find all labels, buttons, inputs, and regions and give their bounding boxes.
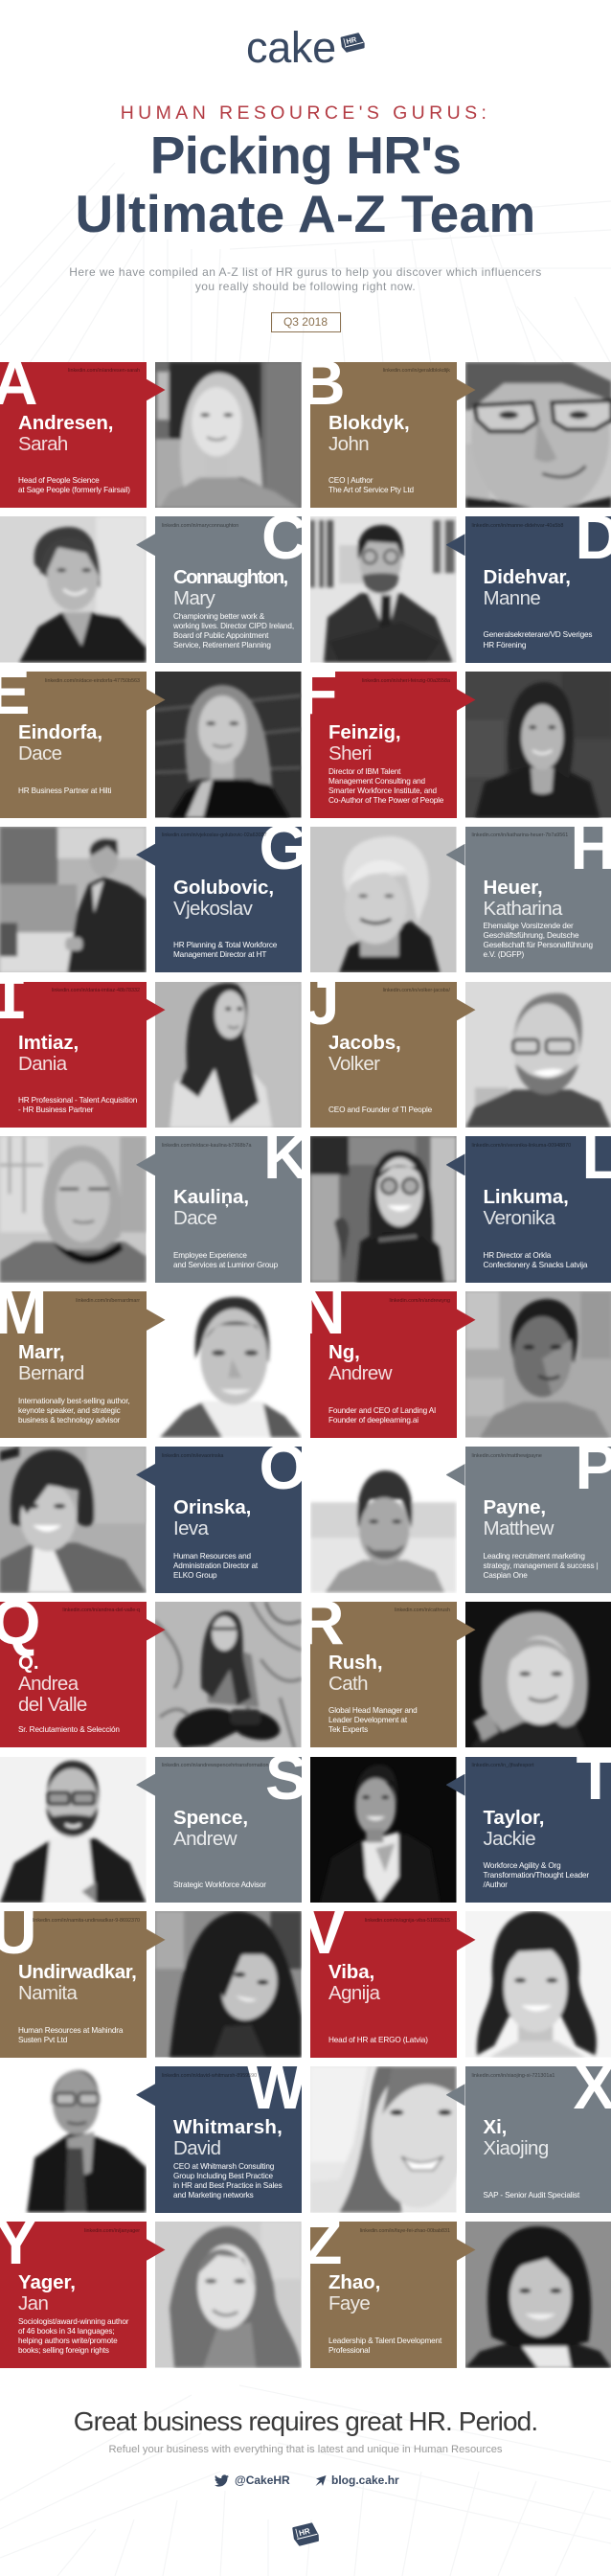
name bbox=[18, 2272, 76, 2314]
intro text: Here we have compiled an A-Z list of HR gurus to help you discover which influencers bbox=[69, 265, 542, 279]
pointer bbox=[146, 1309, 165, 1331]
link: linkedin.com/in/andrewyng bbox=[389, 1298, 450, 1304]
role bbox=[18, 476, 130, 494]
name: Jackie bbox=[483, 1828, 535, 1850]
pointer bbox=[446, 1774, 465, 1796]
role: Founder and CEO of Landing AI bbox=[328, 1406, 436, 1415]
role: at Sage People (formerly Fairsail) bbox=[18, 486, 130, 494]
intro text bbox=[69, 265, 542, 293]
link: linkedin.com/in/volker-jacobs/ bbox=[383, 988, 450, 993]
card: Ng bbox=[310, 1291, 456, 1438]
name bbox=[328, 721, 401, 764]
name: Spence, bbox=[173, 1807, 248, 1829]
pointer bbox=[456, 1309, 475, 1331]
name: Undirwadkar, bbox=[18, 1961, 136, 1983]
name bbox=[18, 412, 113, 454]
role: strategy, management & success | bbox=[483, 1562, 599, 1569]
role: CEO | Author bbox=[328, 476, 373, 485]
role: Ehemalige Vorsitzende der bbox=[483, 922, 574, 930]
name: Veronika bbox=[483, 1207, 554, 1229]
name bbox=[483, 1808, 544, 1850]
role: Head of People Science bbox=[18, 476, 100, 485]
pointer bbox=[446, 534, 465, 556]
name: Viba, bbox=[328, 1961, 374, 1983]
name bbox=[173, 2117, 283, 2159]
card: Eindorfa bbox=[0, 672, 146, 818]
name: Manne bbox=[483, 587, 540, 609]
name: David bbox=[173, 2137, 220, 2159]
card: Q. bbox=[0, 1602, 146, 1747]
pointer bbox=[456, 1928, 475, 1950]
role bbox=[483, 1552, 599, 1581]
name: Agnija bbox=[328, 1982, 379, 2004]
role: Director of IBM Talent bbox=[328, 766, 400, 776]
name: Vjekoslav bbox=[173, 898, 252, 920]
logo icon: HR cube bbox=[341, 33, 365, 53]
link: linkedin.com/in/david-whitmarsh-8959590 bbox=[162, 2073, 257, 2079]
card: Zhao bbox=[310, 2222, 456, 2368]
card: Viba bbox=[310, 1911, 456, 2058]
pointer bbox=[136, 1153, 155, 1175]
card: Heuer bbox=[465, 827, 611, 972]
role bbox=[18, 1096, 137, 1114]
photo: Volker Jacobs bbox=[465, 982, 611, 1128]
role bbox=[328, 1706, 418, 1735]
name: John bbox=[328, 433, 369, 454]
name bbox=[173, 1808, 248, 1850]
name: Bernard bbox=[18, 1362, 84, 1384]
role bbox=[483, 1861, 589, 1890]
pointer bbox=[446, 1464, 465, 1486]
name: Dace bbox=[18, 742, 61, 764]
link: linkedin.com/in/namita-undirwadkar-9-8692370 bbox=[33, 1918, 140, 1924]
date badge: Q3 2018 bbox=[283, 315, 328, 329]
name bbox=[173, 1497, 251, 1539]
link: linkedin.com/in/manne-didehvar-40a5b8 bbox=[471, 523, 563, 529]
photo: Sheri Feinzig bbox=[465, 672, 611, 818]
role bbox=[328, 476, 414, 494]
link: linkedin.com/in/faye-fei-zhao-00bab831 bbox=[360, 2228, 450, 2234]
name: Orinska, bbox=[173, 1496, 251, 1518]
name bbox=[173, 566, 287, 609]
photo: Bernard Marr bbox=[155, 1291, 301, 1438]
role bbox=[173, 1552, 258, 1581]
title line 1: Picking HR's bbox=[150, 125, 461, 185]
name bbox=[18, 1962, 136, 2004]
role: Management Consulting and bbox=[328, 776, 425, 786]
pointer bbox=[146, 689, 165, 711]
card: Kauliņa bbox=[155, 1136, 301, 1283]
name: Imtiaz, bbox=[18, 1032, 79, 1054]
name bbox=[483, 1187, 569, 1229]
photo: Jan Yager bbox=[155, 2222, 301, 2368]
role: - HR Business Partner bbox=[18, 1106, 93, 1114]
role: e.V. (DGFP) bbox=[483, 950, 524, 959]
photo: Ieva Orinska bbox=[0, 1447, 146, 1592]
icon: footer HR cube bbox=[291, 2521, 320, 2546]
role: Head of HR at ERGO (Latvia) bbox=[328, 2036, 428, 2044]
kicker: HUMAN RESOURCE'S GURUS: bbox=[121, 103, 490, 124]
card: Rush bbox=[310, 1602, 456, 1747]
photo: Mary Connaughton bbox=[0, 516, 147, 663]
name: Eindorfa, bbox=[18, 721, 102, 743]
role bbox=[483, 922, 593, 959]
role: books; selling foreign rights bbox=[18, 2345, 109, 2355]
name: Sarah bbox=[18, 433, 68, 454]
name: Linkuma, bbox=[483, 1186, 569, 1208]
photo: Cath Rush bbox=[465, 1602, 611, 1747]
card: Andresen bbox=[0, 362, 146, 508]
logo wordmark: cake bbox=[246, 23, 336, 72]
name bbox=[328, 1342, 392, 1384]
role: Tek Experts bbox=[328, 1725, 368, 1734]
photo: Dace Kauliņa bbox=[0, 1136, 146, 1283]
card: Didehvar bbox=[465, 516, 611, 663]
role: Geschäftsführung, Deutsche bbox=[483, 931, 578, 940]
name bbox=[18, 1653, 87, 1716]
photo: Sarah Andresen bbox=[155, 362, 302, 508]
name: Dace bbox=[173, 1207, 216, 1229]
role: Confectionery & Snacks Latvija bbox=[483, 1261, 587, 1269]
name bbox=[18, 1032, 79, 1075]
link: linkedin.com/in/cathrush bbox=[395, 1607, 450, 1613]
role: The Art of Service Pty Ltd bbox=[328, 486, 414, 494]
role: business & technology advisor bbox=[18, 1416, 120, 1425]
name: Rush, bbox=[328, 1652, 382, 1674]
name bbox=[328, 1653, 382, 1695]
name: Jacobs, bbox=[328, 1032, 401, 1054]
pointer bbox=[456, 1619, 475, 1641]
link: linkedin.com/in/ievaorinska bbox=[162, 1452, 223, 1458]
closing headline: Great business requires great HR. Period. bbox=[74, 2406, 537, 2436]
name: Connaughton, bbox=[173, 566, 287, 588]
name: Payne, bbox=[483, 1496, 546, 1518]
pointer bbox=[456, 689, 475, 711]
name: Golubovic, bbox=[173, 877, 274, 899]
name bbox=[328, 412, 410, 454]
role: Workforce Agility & Org bbox=[483, 1861, 561, 1870]
closing subtext: Refuel your business with everything that is latest and unique in Human Resources bbox=[108, 2444, 503, 2455]
name bbox=[483, 2117, 549, 2159]
photo: Veronika Linkuma bbox=[310, 1136, 456, 1283]
name: Katharina bbox=[483, 898, 562, 920]
name: Ng, bbox=[328, 1341, 360, 1363]
role: Leading recruitment marketing bbox=[483, 1552, 585, 1560]
link: linkedin.com/in/xiaojing-xi-721301a1 bbox=[471, 2073, 554, 2079]
role: helping authors write/promote bbox=[18, 2336, 118, 2345]
name: Dania bbox=[18, 1053, 67, 1075]
role: Administration Director at bbox=[173, 1562, 258, 1569]
role: working lives. Director CIPD Ireland, bbox=[173, 622, 294, 630]
link: linkedin.com/in/vjekoslav-golubovic-02a63037 bbox=[162, 832, 267, 838]
role bbox=[328, 766, 443, 805]
pointer bbox=[136, 1464, 155, 1486]
name: Jan bbox=[18, 2292, 48, 2314]
card: Golubovic bbox=[155, 827, 301, 972]
role: CEO at Whitmarsh Consulting bbox=[173, 2162, 274, 2171]
photo: Agnija Viba bbox=[465, 1911, 611, 2058]
pointer bbox=[136, 2084, 155, 2106]
pointer bbox=[446, 844, 465, 866]
role bbox=[328, 2336, 441, 2355]
role: Employee Experience bbox=[173, 1251, 247, 1260]
role: in HR and Best Practice in Sales bbox=[173, 2181, 283, 2190]
photo: Jackie Taylor bbox=[310, 1757, 456, 1903]
card: Orinska bbox=[155, 1447, 301, 1592]
pointer bbox=[146, 1619, 165, 1641]
card: Connaughton bbox=[155, 516, 301, 663]
role: Management Director at HT bbox=[173, 950, 266, 959]
name: Sheri bbox=[328, 742, 372, 764]
role: Leader Development at bbox=[328, 1716, 407, 1724]
role: SAP - Senior Audit Specialist bbox=[483, 2191, 579, 2200]
card: Whitmarsh bbox=[155, 2066, 301, 2213]
name bbox=[173, 877, 274, 920]
card: Linkuma bbox=[465, 1136, 611, 1283]
name: Namita bbox=[18, 1982, 77, 2004]
link: linkedin.com/in/matthewjpayne bbox=[471, 1452, 542, 1458]
intro text: you really should be following right now. bbox=[195, 280, 416, 293]
role: Co-Author of The Power of People bbox=[328, 795, 443, 805]
name bbox=[483, 877, 563, 920]
card: Payne bbox=[465, 1447, 611, 1592]
role bbox=[18, 2316, 128, 2355]
name: Mary bbox=[173, 587, 215, 609]
card: Feinzig bbox=[310, 672, 456, 818]
role: HR Professional - Talent Acquisition bbox=[18, 1096, 137, 1105]
name: Marr, bbox=[18, 1341, 65, 1363]
link: linkedin.com/in/agnija-viba-51892b15 bbox=[365, 1918, 450, 1924]
pointer bbox=[136, 1774, 155, 1796]
name bbox=[173, 1187, 249, 1229]
link: linkedin.com/in/maryconnaughton bbox=[162, 523, 238, 529]
name: Andrew bbox=[328, 1362, 392, 1384]
date badge bbox=[270, 312, 341, 332]
name bbox=[18, 1342, 84, 1384]
role bbox=[328, 1406, 436, 1425]
name: Taylor, bbox=[483, 1807, 544, 1829]
name: Kauliņa, bbox=[173, 1186, 249, 1208]
role: Sociologist/award-winning author bbox=[18, 2316, 128, 2326]
role: Leadership & Talent Development bbox=[328, 2336, 441, 2345]
role: HR Business Partner at Hilti bbox=[18, 786, 111, 795]
role bbox=[18, 1397, 130, 1425]
photo: Matthew Payne bbox=[310, 1447, 456, 1592]
photo: Manne Didehvar bbox=[310, 516, 457, 663]
link: linkedin.com/in/andrewspencehrtransformation bbox=[162, 1763, 268, 1768]
role: Gesellschaft für Personalführung bbox=[483, 941, 593, 949]
name: Ieva bbox=[173, 1517, 208, 1539]
name: Feinzig, bbox=[328, 721, 401, 743]
link: linkedin.com/in/bernardmarr bbox=[76, 1298, 140, 1304]
role: Generalsekreterare/VD Sveriges bbox=[483, 630, 592, 639]
role: HR Director at Orkla bbox=[483, 1251, 551, 1260]
pointer bbox=[446, 1153, 465, 1175]
role: Service, Retirement Planning bbox=[173, 641, 271, 650]
name: Andrew bbox=[173, 1828, 237, 1850]
role: and Marketing networks bbox=[173, 2191, 254, 2200]
card: Imtiaz bbox=[0, 982, 146, 1128]
pointer bbox=[146, 1928, 165, 1950]
role bbox=[18, 2026, 123, 2045]
pointer bbox=[136, 844, 155, 866]
name: Q. bbox=[18, 1652, 38, 1674]
twitter handle: @CakeHR bbox=[235, 2473, 290, 2487]
name: Cath bbox=[328, 1673, 368, 1695]
photo: Andrea del Valle Q. bbox=[155, 1602, 301, 1747]
pointer bbox=[136, 534, 155, 556]
name: Heuer, bbox=[483, 877, 543, 899]
link: linkedin.com/in/veronika-linkuma-00948870 bbox=[471, 1143, 571, 1149]
role bbox=[483, 1251, 587, 1270]
name: Xi, bbox=[483, 2116, 507, 2138]
name: Yager, bbox=[18, 2271, 76, 2293]
name: Didehvar, bbox=[483, 566, 571, 588]
name: Volker bbox=[328, 1053, 379, 1075]
role: CEO and Founder of Tl People bbox=[328, 1106, 432, 1114]
link: linkedin.com/in/dace-eindorfa-47750b563 bbox=[45, 678, 140, 684]
photo: Andrew Ng bbox=[465, 1291, 611, 1438]
link: linkedin.com/in/katharina-heuer-7b7a9561 bbox=[471, 832, 568, 838]
pointer bbox=[456, 2239, 475, 2261]
role bbox=[173, 1251, 278, 1270]
link: linkedin.com/in/janyager bbox=[84, 2228, 140, 2234]
role bbox=[173, 612, 294, 650]
role bbox=[483, 630, 592, 650]
name bbox=[18, 721, 102, 764]
card: Blokdyk bbox=[310, 362, 456, 508]
logo bbox=[246, 23, 365, 72]
role: HR Planning & Total Workforce bbox=[173, 941, 277, 949]
photo: Vjekoslav Golubovic bbox=[0, 827, 147, 972]
role: Smarter Workforce Institute, and bbox=[328, 786, 437, 795]
link: linkedin.com/in/dace-kaulina-b7368b7a bbox=[162, 1143, 251, 1149]
pointer bbox=[146, 999, 165, 1021]
role: Professional bbox=[328, 2345, 370, 2355]
title line 2: Ultimate A-Z Team bbox=[75, 184, 536, 243]
name: del Valle bbox=[18, 1694, 87, 1716]
role: keynote speaker, and strategic bbox=[18, 1406, 121, 1415]
link: linkedin.com/in/dania-imtiaz-48b78332 bbox=[52, 988, 140, 993]
title bbox=[75, 125, 536, 243]
name: Whitmarsh, bbox=[173, 2116, 283, 2138]
role: Board of Public Appointment bbox=[173, 631, 268, 640]
card: Marr bbox=[0, 1291, 146, 1438]
photo: Namita Undirwadkar bbox=[155, 1911, 301, 2058]
name: Faye bbox=[328, 2292, 370, 2314]
role: Internationally best-selling author, bbox=[18, 1397, 130, 1405]
link: linkedin.com/in/sheri-feinzig-00a3558a bbox=[362, 678, 450, 684]
role: of 46 books in 34 languages; bbox=[18, 2326, 115, 2336]
role: and Services at Luminor Group bbox=[173, 1261, 278, 1269]
role: Transformation/Thought Leader bbox=[483, 1871, 589, 1880]
photo: Faye Zhao bbox=[465, 2222, 611, 2368]
role bbox=[173, 2162, 283, 2200]
name bbox=[328, 2272, 380, 2314]
pointer bbox=[456, 999, 475, 1021]
card: Undirwadkar bbox=[0, 1911, 146, 2058]
name bbox=[328, 1962, 379, 2004]
role: Human Resources at Mahindra bbox=[18, 2026, 123, 2035]
card: Jacobs bbox=[310, 982, 456, 1128]
photo: Dace Eindorfa bbox=[155, 672, 302, 818]
role: Susten Pvt Ltd bbox=[18, 2036, 67, 2044]
icon: arrow bbox=[315, 2474, 327, 2487]
role: Global Head Manager and bbox=[328, 1706, 418, 1715]
role: ELKO Group bbox=[173, 1571, 216, 1579]
name: Xiaojing bbox=[483, 2137, 549, 2159]
logo icon: HR cube: HR bbox=[346, 34, 358, 46]
role: Founder of deeplearning.ai bbox=[328, 1416, 419, 1425]
role bbox=[173, 941, 277, 959]
pointer bbox=[146, 2239, 165, 2261]
icon: footer HR cube: HR bbox=[298, 2526, 311, 2538]
role: HR Förening bbox=[483, 641, 526, 650]
photo: Katharina Heuer bbox=[310, 827, 456, 972]
link: linkedin.com/in_/jfsafesport bbox=[471, 1763, 534, 1768]
role: Strategic Workforce Advisor bbox=[173, 1881, 266, 1889]
blog link: blog.cake.hr bbox=[331, 2473, 399, 2487]
name: Matthew bbox=[483, 1517, 554, 1539]
icon: twitter bbox=[215, 2473, 229, 2488]
role: Sr. Reclutamiento & Selección bbox=[18, 1725, 120, 1734]
photo: David Whitmarsh bbox=[0, 2066, 146, 2213]
card: Spence bbox=[155, 1757, 301, 1903]
role: Human Resources and bbox=[173, 1552, 251, 1560]
photo: Andrew Spence bbox=[0, 1757, 146, 1903]
pointer bbox=[146, 379, 165, 400]
name: Andrea bbox=[18, 1673, 79, 1695]
link: linkedin.com/in/andresen-sarah bbox=[68, 368, 140, 374]
name bbox=[483, 566, 571, 609]
name: Zhao, bbox=[328, 2271, 380, 2293]
role: Group Including Best Practice bbox=[173, 2172, 273, 2180]
card: Xi bbox=[465, 2066, 611, 2213]
name: Blokdyk, bbox=[328, 412, 410, 433]
link: linkedin.com/in/andrea-del-valle-q bbox=[62, 1607, 140, 1613]
name: Andresen, bbox=[18, 412, 113, 433]
photo: Xiaojing Xi bbox=[310, 2066, 456, 2213]
card: Yager bbox=[0, 2222, 146, 2368]
link: linkedin.com/in/geraldblokdijk bbox=[383, 368, 450, 374]
name bbox=[483, 1497, 554, 1539]
photo: Dania Imtiaz bbox=[155, 982, 302, 1128]
photo: John Blokdyk bbox=[465, 362, 611, 508]
role: /Author bbox=[483, 1881, 508, 1889]
pointer bbox=[446, 2084, 465, 2106]
card: Taylor bbox=[465, 1757, 611, 1903]
pointer bbox=[456, 379, 475, 400]
role: Championing better work & bbox=[173, 612, 264, 621]
role: Caspian One bbox=[483, 1571, 528, 1579]
name bbox=[328, 1033, 401, 1075]
